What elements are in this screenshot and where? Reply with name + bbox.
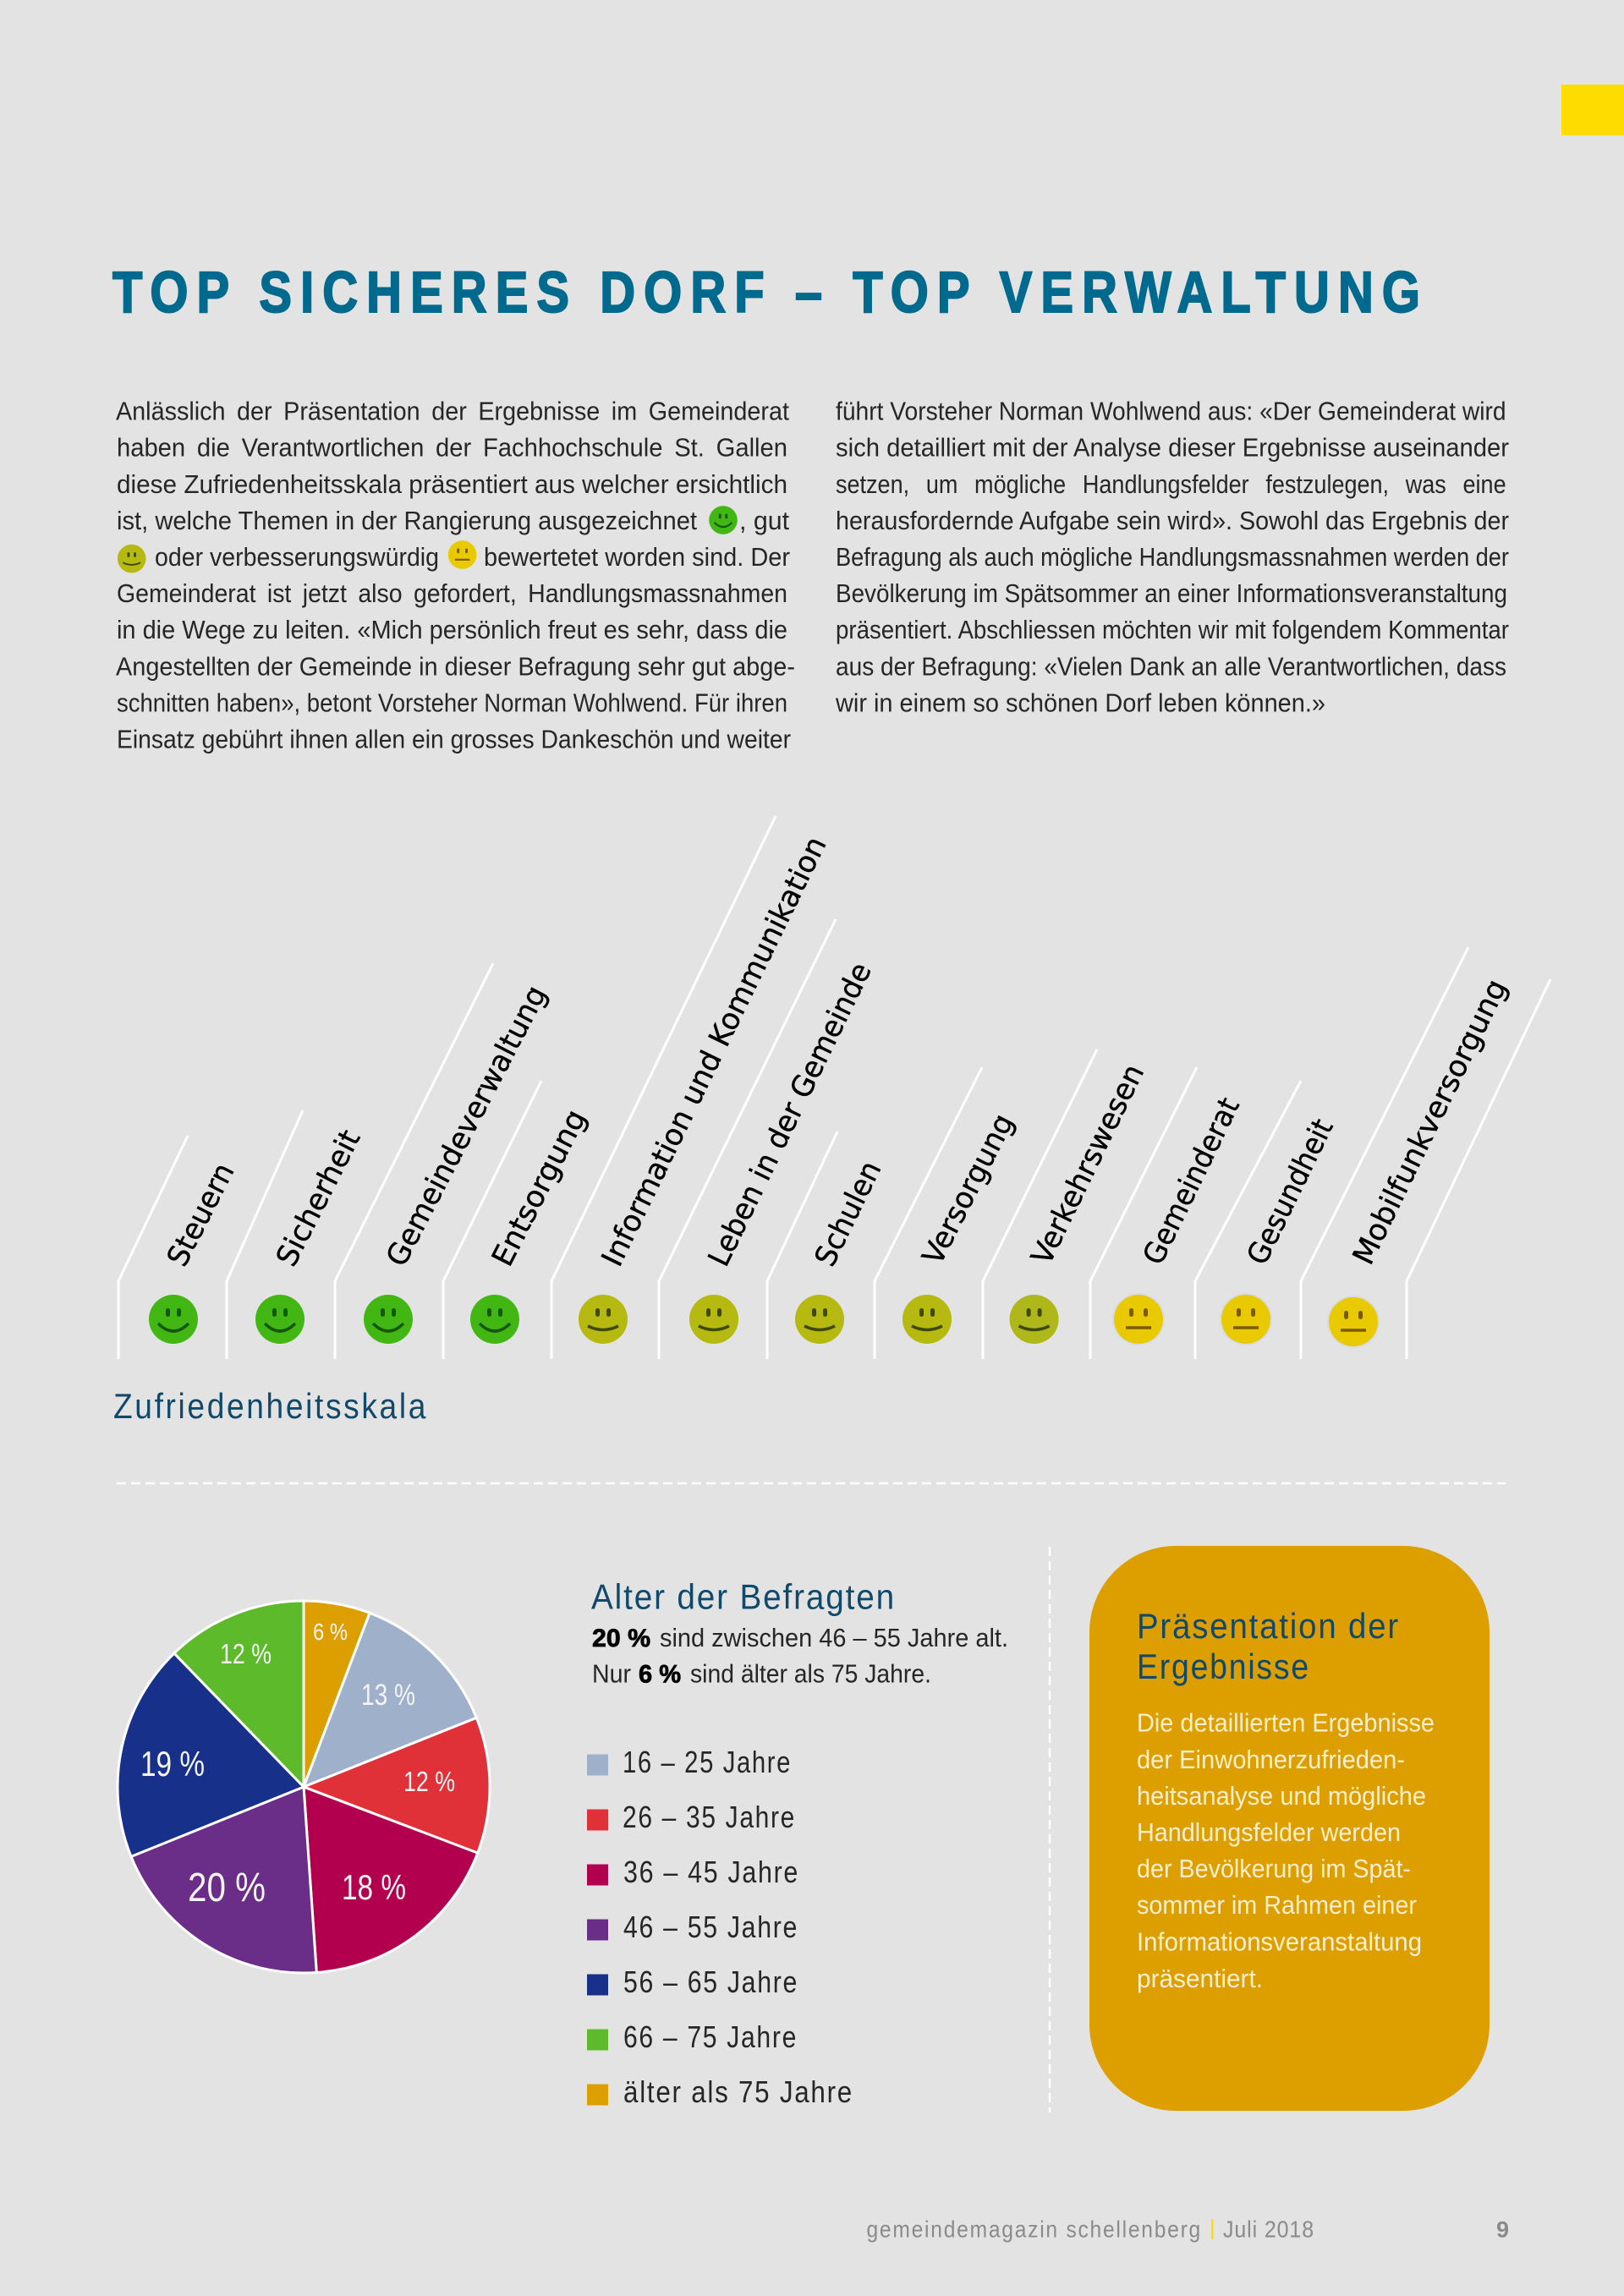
legend: 56 – 65 Jahre <box>623 1964 798 1999</box>
text block: left column: diese Zufriedenheitsskala präsentiert aus welcher ersichtlich <box>117 469 787 499</box>
pie chart: age of respondents <box>118 1601 490 1973</box>
column: Gemeinderat <box>1090 1067 1247 1359</box>
column: Versorgung: Versorgung <box>916 1109 1021 1270</box>
panel body text <box>1137 1708 1435 1993</box>
column: Information und Kommunikation: Information und Kommunikation <box>595 831 834 1272</box>
column: Gesundheit <box>1195 1081 1341 1359</box>
text: age summary: 6 % <box>639 1661 681 1689</box>
panel body text: Informationsveranstaltung <box>1137 1927 1422 1957</box>
chart: satisfaction scale <box>118 816 1550 1359</box>
text block: right column: Befragung als auch mögliche Handlungsmassnahmen werden der <box>836 542 1509 572</box>
legend: älter als 75 Jahre <box>623 2074 853 2109</box>
pie chart: age of respondents: 12 % <box>403 1766 455 1797</box>
footer: gemeindemagazin schellenberg <box>866 2217 1202 2243</box>
text block: left column: Angestellten der Gemeinde in dieser Befragung sehr gut abge- <box>116 651 795 681</box>
text: age summary <box>592 1623 1008 1689</box>
column: Leben in der Gemeinde <box>659 919 879 1359</box>
heading: Alter der Befragten: Alter der Befragten <box>591 1577 896 1617</box>
text: age summary: sind zwischen 46 – 55 Jahre alt. <box>660 1623 1008 1652</box>
legend: 16 – 25 Jahre <box>623 1745 792 1779</box>
panel body text: heitsanalyse und mögliche <box>1137 1781 1426 1811</box>
panel body text: Die detaillierten Ergebnisse <box>1137 1708 1435 1738</box>
legend: 46 – 55 Jahre <box>623 1910 798 1944</box>
panel body text: der Einwohnerzufrieden- <box>1137 1745 1405 1774</box>
column: Gesundheit: Gesundheit <box>1241 1114 1341 1270</box>
footer: 9 <box>1496 2217 1509 2243</box>
panel body text: sommer im Rahmen einer <box>1137 1890 1417 1920</box>
pie chart: age of respondents: 6 % <box>313 1619 348 1645</box>
column: Sicherheit: Sicherheit <box>270 1125 367 1272</box>
pie chart: age of respondents: 12 % <box>220 1638 272 1669</box>
column: Steuern: Steuern <box>161 1158 241 1272</box>
icon: olive smiley inline <box>118 545 146 573</box>
column: Entsorgung: Entsorgung <box>486 1104 594 1272</box>
pie chart: age of respondents: 13 % <box>361 1679 415 1712</box>
text block: left column <box>116 397 795 754</box>
text: age summary: Nur <box>592 1659 631 1689</box>
column: Schulen <box>767 1132 888 1359</box>
pie chart: age of respondents: 19 % <box>140 1744 205 1784</box>
column: Versorgung <box>875 1067 1021 1359</box>
column: Entsorgung <box>443 1081 594 1359</box>
column: Mobilfunkversorgung <box>1301 947 1514 1359</box>
legend <box>587 1745 853 2109</box>
legend: 36 – 45 Jahre <box>623 1855 799 1889</box>
panel heading <box>1137 1606 1400 1686</box>
panel heading: Präsentation der <box>1137 1606 1400 1646</box>
icon: yellow neutral smiley inline <box>448 540 476 569</box>
pie chart: age of respondents: 20 % <box>188 1866 266 1910</box>
text block: right column: Bevölkerung im Spätsommer an einer Informationsveranstaltung <box>836 578 1507 608</box>
column: Leben in der Gemeinde: Leben in der Gemeinde <box>702 957 879 1272</box>
legend: 26 – 35 Jahre <box>623 1800 796 1834</box>
text: age summary: 20 % <box>592 1625 650 1652</box>
text block: right column: sich detailliert mit der Analyse dieser Ergebnisse auseinander <box>836 433 1509 463</box>
text block: right column: aus der Befragung: «Vielen Dank an alle Verantwortlichen, dass <box>836 651 1506 681</box>
text block: right column: präsentiert. Abschliessen möchten wir mit folgendem Kommentar <box>836 615 1509 644</box>
text block: right column: setzen, um mögliche Handlungsfelder festzulegen, was eine <box>836 469 1506 499</box>
text block: left column: ist, welche Themen in der Rangierung ausgezeichnet <box>117 506 697 535</box>
legend: 66 – 75 Jahre <box>623 2019 798 2054</box>
text block: right column: herausfordernde Aufgabe sein wird». Sowohl das Ergebnis der <box>836 506 1509 535</box>
text block: left column: schnitten haben», betont Vorsteher Norman Wohlwend. Für ihren <box>117 688 787 717</box>
column: Gemeindeverwaltung <box>335 963 554 1359</box>
text block: left column: haben die Verantwortlichen der Fachhochschule St. Gallen <box>117 433 787 463</box>
text: age summary: sind älter als 75 Jahre. <box>690 1659 931 1689</box>
column: Sicherheit <box>227 1110 367 1359</box>
panel heading: Ergebnisse <box>1137 1647 1310 1686</box>
panel body text: präsentiert. <box>1137 1964 1263 1993</box>
column: Schulen: Schulen <box>809 1156 888 1272</box>
panel body text: Handlungsfelder werden <box>1137 1817 1401 1847</box>
text block: left column: Anlässlich der Präsentation der Ergebnisse im Gemeinderat <box>116 397 789 426</box>
text block: left column: Gemeinderat ist jetzt also gefordert, Handlungsmassnahmen <box>117 578 787 608</box>
text block: left column: oder verbesserungswürdig <box>155 542 439 572</box>
panel body text: der Bevölkerung im Spät- <box>1137 1854 1411 1883</box>
column: Verkehrswesen <box>983 1049 1151 1359</box>
text block: right column: wir in einem so schönen Dorf leben können.» <box>835 688 1325 717</box>
column: Gemeindeverwaltung: Gemeindeverwaltung <box>381 980 554 1272</box>
column: Verkehrswesen: Verkehrswesen <box>1025 1060 1151 1270</box>
text block: left column: in die Wege zu leiten. «Mich persönlich freut es sehr, dass die <box>117 615 787 644</box>
text block: left column: , gut <box>739 506 789 535</box>
text block: right column: führt Vorsteher Norman Wohlwend aus: «Der Gemeinderat wird <box>836 397 1506 426</box>
yellow page tab <box>1561 85 1624 135</box>
text block: left column: Einsatz gebührt ihnen allen ein grosses Dankeschön und weiter <box>117 724 791 754</box>
icon: green smiley inline <box>709 506 738 534</box>
column: Steuern <box>118 1136 241 1359</box>
heading: Zufriedenheitsskala: Zufriedenheitsskala <box>113 1386 428 1426</box>
column: Mobilfunkversorgung: Mobilfunkversorgung <box>1347 974 1514 1270</box>
footer: Juli 2018 <box>1223 2217 1314 2243</box>
text block: left column: bewertetet worden sind. Der <box>484 542 790 572</box>
column: Information und Kommunikation <box>551 816 834 1359</box>
pie chart: age of respondents: 18 % <box>342 1867 406 1907</box>
column: Gemeinderat: Gemeinderat <box>1137 1093 1247 1270</box>
footer <box>866 2217 1509 2243</box>
panel: Präsentation der Ergebnisse <box>1089 1546 1490 2111</box>
text block: right column <box>835 397 1509 717</box>
